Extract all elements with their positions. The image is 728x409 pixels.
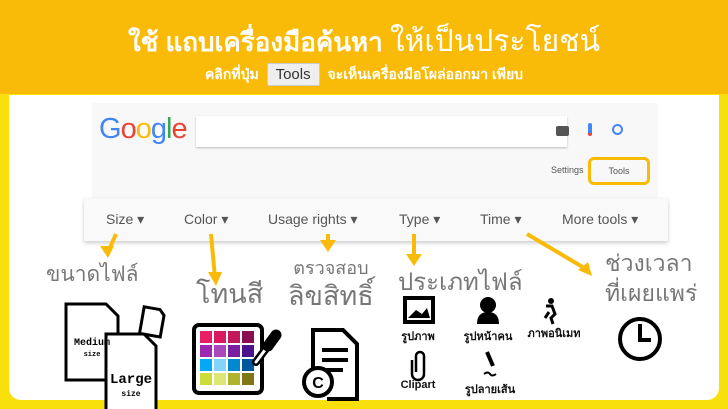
- white panel: [9, 95, 719, 400]
- arrows: C: [312, 375, 324, 392]
- arrows: Medium: [74, 337, 110, 349]
- title: ใช้ แถบเครื่องมือค้นหา ให้เป็นประโยชน์: [128, 25, 600, 58]
- subtitle: Tools: [276, 66, 311, 83]
- icon: camera: [556, 126, 569, 136]
- label: usage rights: [288, 258, 376, 311]
- tools menu bar: Type ▾: [399, 211, 440, 227]
- label: usage rights: ตรวจสอบ: [293, 258, 368, 278]
- icon: image type: [405, 298, 433, 322]
- tools menu bar: Time ▾: [480, 211, 522, 227]
- label: file type: ประเภทไฟล์: [398, 269, 523, 296]
- icon: mic: [588, 123, 592, 136]
- text: รูปหน้าคน: [464, 331, 512, 343]
- tools menu bar: More tools ▾: [562, 211, 638, 227]
- label: time: ช่วงเวลา: [605, 250, 693, 276]
- icon: running animation: [548, 298, 554, 304]
- tools highlight: Tools: [608, 166, 630, 176]
- search box: [196, 116, 567, 147]
- header band: [0, 0, 728, 94]
- label: time: [605, 250, 697, 306]
- label: file size: ขนาดไฟล์: [46, 263, 138, 286]
- arrows: size: [84, 351, 100, 359]
- subtitle: [205, 63, 523, 86]
- icon: colour palette: [194, 325, 276, 393]
- text: รูปลายเส้น: [465, 384, 515, 396]
- tools menu bar: [84, 198, 668, 241]
- settings link: Settings: [551, 165, 584, 175]
- label: time: ที่เผยแพร่: [605, 280, 697, 306]
- text: ภาพอนิเมท: [527, 328, 581, 340]
- icon: face: [480, 297, 496, 313]
- label: colour: โทนสี: [196, 279, 263, 309]
- icon: search: [612, 124, 623, 135]
- type labels: รูปภาพ: [401, 331, 435, 343]
- tools menu bar: Usage rights ▾: [268, 211, 358, 227]
- subtitle: คลิกที่ปุ่ม จะเห็นเครื่องมือโผล่ออกมา เพียบ: [205, 66, 523, 82]
- tools menu bar: Color ▾: [184, 211, 228, 227]
- tools menu bar: Size ▾: [106, 211, 144, 227]
- icon: line drawing pen: [487, 352, 493, 366]
- icon: clip: [412, 352, 424, 380]
- google logo: Google: [99, 113, 187, 145]
- tools highlight: [588, 157, 650, 185]
- label: usage rights: ลิขสิทธิ์: [288, 281, 374, 311]
- text: Clipart: [401, 379, 435, 391]
- icon: clock: [620, 319, 660, 359]
- icon: file size documents: [66, 304, 165, 409]
- icon: copyright document: [304, 330, 357, 399]
- google search panel: [92, 103, 658, 199]
- arrows: Large: [110, 372, 152, 388]
- arrows: size: [121, 390, 141, 399]
